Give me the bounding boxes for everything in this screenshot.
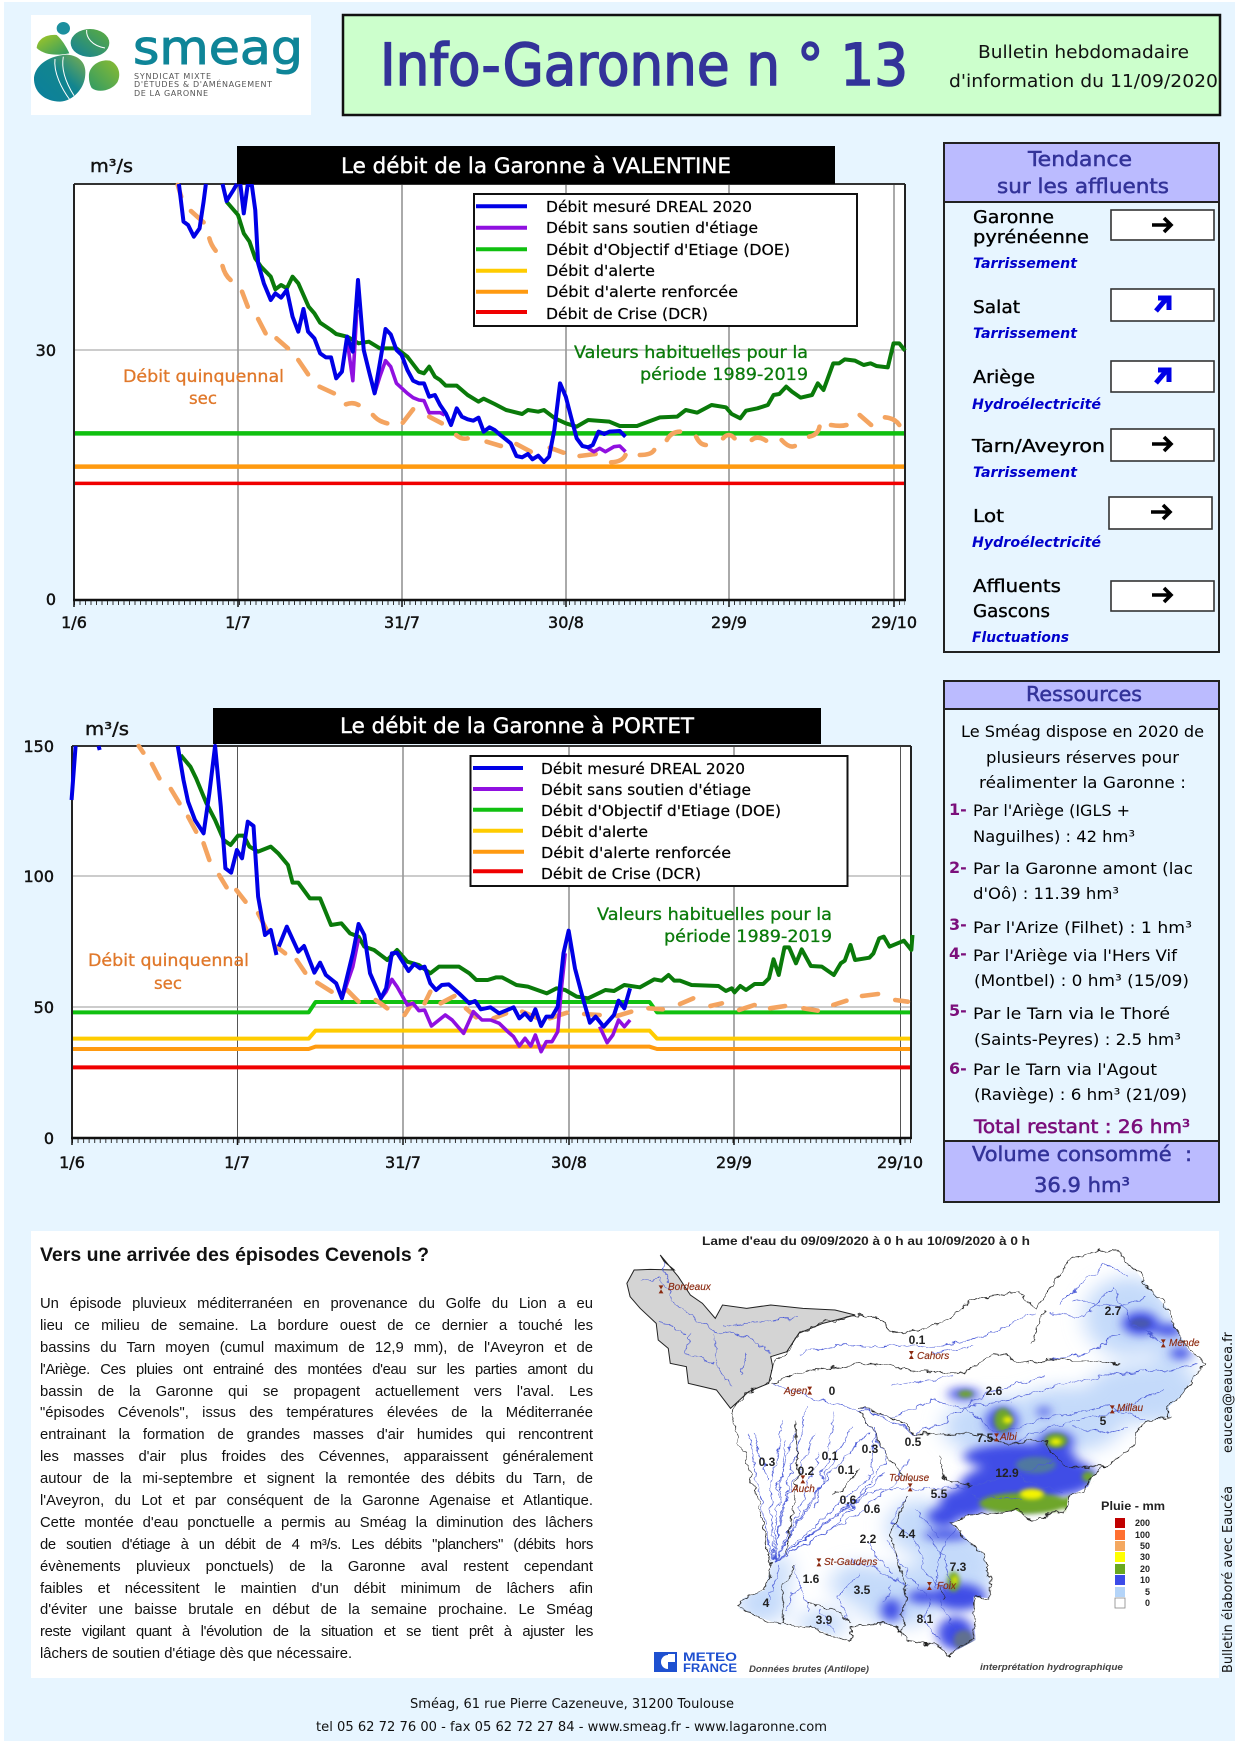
label: dry five-year flow: Débit quinquennal [88, 951, 249, 971]
city labels: Toulouse [889, 1473, 930, 1484]
item: Lot: Lot [973, 506, 1004, 527]
y axis labels: 50 [34, 998, 54, 1017]
map: rainfall over the Garonne basin [627, 1236, 1205, 1675]
rainfall values: 2.2 [860, 1532, 877, 1546]
reserve 4: (Montbel) : 0 hm³ (15/09) [974, 971, 1189, 990]
logo subtitle: DE LA GARONNE [134, 89, 208, 98]
curve: usual values [181, 755, 912, 998]
x axis labels: 31/7 [385, 1153, 421, 1172]
logo: Météo France: METEO [683, 1650, 737, 1664]
reserve 2: Par la Garonne amont (lac [973, 859, 1193, 878]
label: dry five-year flow [123, 367, 284, 409]
x axis labels [61, 613, 917, 632]
x axis labels: 29/10 [871, 613, 917, 632]
city labels: Millau [1117, 1403, 1144, 1414]
rainfall values: 0.2 [798, 1464, 815, 1478]
item: Ariège: Hydroélectricité [972, 397, 1102, 413]
panel heading: Ressources [1026, 682, 1142, 706]
rainfall legend: 30 [1140, 1552, 1150, 1562]
panel heading [944, 681, 1219, 709]
x axis labels: 29/10 [877, 1153, 923, 1172]
y axis unit: m³/s [85, 719, 129, 740]
article text: évènements pluvieux ponctuels) de la Garonne aval restent cependant [40, 1559, 593, 1575]
curve: measured flow [72, 746, 630, 1027]
reserve 2: d'Oô) : 11.39 hm³ [973, 884, 1119, 903]
label: dry five-year flow [88, 951, 249, 994]
logo: Météo France: FRANCE [683, 1661, 737, 1675]
reserve 4: 4- [949, 944, 967, 963]
item: Ariège: Ariège [973, 367, 1035, 388]
panel: article and map background [31, 1231, 1219, 1678]
panel: tributary trends [944, 143, 1219, 652]
y axis labels: 0 [44, 1129, 54, 1148]
x axis labels [59, 1153, 923, 1172]
city labels: Agen [783, 1386, 808, 1397]
legend: Débit d'alerte [541, 823, 648, 841]
curve: usual values [227, 202, 905, 427]
intro text: réalimenter la Garonne : [979, 773, 1186, 792]
side credit: Bulletin élaboré avec Eaucéa [1220, 1486, 1236, 1673]
x axis labels: 29/9 [716, 1153, 752, 1172]
legend: Débit d'Objectif d'Etiage (DOE) [541, 802, 781, 820]
intro text [961, 722, 1204, 792]
item: Affluents Gascons: Fluctuations [972, 630, 1069, 646]
legend: Débit d'alerte [546, 262, 655, 280]
item: Tarn/Aveyron [971, 429, 1214, 481]
reserve 6 [949, 1059, 1187, 1104]
item: Garonne pyrénéenne: pyrénéenne [973, 227, 1089, 248]
rainfall values: 0.1 [838, 1463, 855, 1477]
article text: autour de la mi-septembre et signent la remontée des débits du Tarn, de [40, 1471, 593, 1487]
rainfall values: 5.5 [931, 1487, 948, 1501]
footer address: Sméag, 61 rue Pierre Cazeneuve, 31200 Toulouse [410, 1697, 734, 1712]
legend: Débit d'alerte renforcée [546, 283, 738, 301]
item: Tarn/Aveyron: Tarrissement [973, 465, 1078, 481]
wordmark: smeag [133, 21, 303, 76]
title banner [343, 15, 1220, 115]
article text: bassin de la Garonne qui se propagent actuellement vers l'aval. Les [40, 1384, 593, 1400]
map shapes [627, 1248, 1205, 1655]
x axis labels: 30/8 [551, 1153, 587, 1172]
chart title: Le débit de la Garonne à PORTET [340, 714, 694, 738]
legend: Débit sans soutien d'étiage [541, 781, 751, 799]
legend: Débit de Crise (DCR) [541, 865, 701, 883]
rainfall values: 2.6 [986, 1384, 1003, 1398]
article text: faibles et nécessitent le maintien d'un débit minimum de lâchers afin [40, 1581, 593, 1597]
item: Salat: Salat [973, 297, 1020, 318]
item: Salat [973, 289, 1214, 342]
reserve 6: 6- [949, 1059, 967, 1078]
y axis labels: 30 [36, 341, 56, 360]
reserve 1: Naguilhes) : 42 hm³ [973, 827, 1135, 846]
rainfall legend: 50 [1140, 1541, 1150, 1551]
rainfall values: 0 [829, 1384, 836, 1398]
reserve 4 [949, 944, 1189, 990]
panel: resources [944, 681, 1219, 1202]
x axis labels: 1/7 [225, 613, 251, 632]
city labels: Foix [937, 1581, 957, 1592]
curve: flow without support [342, 938, 630, 1052]
plot area [71, 746, 912, 1145]
reserve 1: 1- [949, 800, 967, 819]
city labels: Bordeaux [668, 1282, 712, 1293]
side credit [1220, 1332, 1236, 1673]
interpretation note: interprétation hydrographique [980, 1662, 1124, 1673]
rainfall values: 4.4 [899, 1527, 916, 1541]
rainfall values: 7.3 [950, 1560, 967, 1574]
rainfall values: 0.5 [905, 1435, 922, 1449]
article text: les masses d'air plus froides des Cévennes, apparaissent généralement [40, 1449, 593, 1465]
rainfall values: 0.3 [862, 1442, 879, 1456]
legend: Débit mesuré DREAL 2020 [546, 198, 752, 216]
bulletin date: d'information du 11/09/2020 [949, 71, 1218, 92]
label: usual values: Valeurs habituelles pour la [574, 343, 808, 363]
item: Ariège [972, 361, 1214, 413]
article text: l'Ariège. Ces pluies ont entrainé des montées d'eau sur les parties amont du [40, 1362, 593, 1378]
rainfall values: 5 [1100, 1414, 1107, 1428]
article text: lieu ce milieu de semaine. La bordure ouest de ce dernier a touché les [40, 1318, 593, 1334]
bulletin date [949, 42, 1218, 92]
item: Tarn/Aveyron: Tarn/Aveyron [971, 436, 1105, 457]
rainfall values: 0.1 [822, 1449, 839, 1463]
item: Garonne pyrénéenne: Garonne [973, 207, 1054, 228]
city labels: Albi [999, 1432, 1017, 1443]
rainfall values: 12.9 [995, 1466, 1019, 1480]
article text: Cette montée d'eau ponctuelle a permis au Sméag la diminution des lâchers [40, 1515, 593, 1531]
volume consumed: 36.9 hm³ [1034, 1173, 1130, 1197]
rainfall values: 7.5 [977, 1431, 994, 1445]
reserve 5 [949, 1001, 1181, 1049]
curve: measured flow [179, 184, 625, 462]
item: Affluents Gascons: Affluents [973, 576, 1061, 597]
chart: Valentine flow [36, 146, 917, 632]
rainfall legend: 100 [1135, 1530, 1150, 1540]
x axis labels: 29/9 [711, 613, 747, 632]
panel heading [944, 143, 1219, 202]
y axis labels: 0 [46, 590, 56, 609]
rainfall legend: 0 [1145, 1598, 1150, 1608]
rainfall values: 0.1 [909, 1333, 926, 1347]
label: usual values: période 1989-2019 [640, 365, 808, 385]
reserve 1: Par l'Ariège (IGLS + [973, 801, 1130, 820]
chart title [213, 708, 821, 744]
article text: l'Aveyron, du Lot et par conséquent de la Garonne Agenaise et Atlantique. [40, 1493, 593, 1509]
legend: Débit mesuré DREAL 2020 [541, 760, 745, 778]
volume consumed [944, 1141, 1219, 1202]
rainfall values [759, 1304, 1122, 1627]
reserve 3: Par l'Arize (Filhet) : 1 hm³ [973, 918, 1192, 937]
city labels: Mende [1169, 1338, 1200, 1349]
rainfall values: 3.5 [854, 1583, 871, 1597]
legend: Débit de Crise (DCR) [546, 305, 708, 323]
label: usual values: Valeurs habituelles pour la [597, 905, 832, 925]
x axis labels: 1/6 [59, 1153, 85, 1172]
label: usual values [597, 905, 832, 947]
label: usual values: période 1989-2019 [664, 927, 832, 947]
volume consumed: Volume consommé : [972, 1142, 1192, 1166]
reserve 4: Par l'Ariège via l'Hers Vif [973, 946, 1177, 965]
reserve 2 [949, 858, 1193, 903]
label: dry five-year flow: sec [189, 389, 217, 409]
reserve 1 [949, 800, 1135, 846]
footer address [316, 1697, 827, 1735]
reserve 6: (Raviège) : 6 hm³ (21/09) [974, 1085, 1187, 1104]
x axis labels: 1/7 [224, 1153, 250, 1172]
city markers [659, 1285, 1166, 1590]
logo subtitle: D'ÉTUDES & D'AMÉNAGEMENT [134, 78, 272, 89]
article text: Un épisode pluvieux méditerranéen en provenance du Golfe du Lion a eu [40, 1296, 593, 1312]
panel heading: sur les affluents [997, 174, 1169, 198]
title: Info-Garonne n ° 13 [380, 31, 908, 99]
icon: pebbles [34, 22, 119, 102]
reserve 5: 5- [949, 1001, 967, 1020]
label: dry five-year flow: Débit quinquennal [123, 367, 284, 387]
rainfall legend [1101, 1499, 1165, 1608]
rainfall values: 3.9 [816, 1613, 833, 1627]
article text: entrainant la formation de grandes masses d'air humides qui rencontrent [40, 1427, 593, 1443]
total remaining: Total restant : 26 hm³ [973, 1116, 1190, 1138]
curve: dry five-year flow [139, 746, 908, 1018]
legend [474, 194, 857, 326]
curve: dry five-year flow [178, 185, 899, 462]
chart title [237, 146, 835, 184]
legend: Débit sans soutien d'étiage [546, 219, 758, 237]
rainfall intensity [737, 1277, 1205, 1650]
label: usual values [574, 343, 808, 385]
reserve 5: Par le Tarn via le Thoré [973, 1004, 1170, 1023]
rainfall values: 0.6 [840, 1493, 857, 1507]
legend: Débit d'Objectif d'Etiage (DOE) [546, 241, 790, 259]
article text [40, 1296, 593, 1662]
label: dry five-year flow: sec [154, 974, 182, 994]
rainfall values: 4 [763, 1596, 770, 1610]
rainfall values: 0.3 [759, 1455, 776, 1469]
rainfall legend: 200 [1135, 1518, 1150, 1528]
intro text: plusieurs réserves pour [986, 748, 1179, 767]
x axis labels: 31/7 [384, 613, 420, 632]
reserve 6: Par le Tarn via l'Agout [973, 1060, 1157, 1079]
item: Lot [972, 497, 1212, 551]
y axis labels [36, 341, 56, 609]
panel heading: Tendance [1027, 147, 1132, 171]
rainfall values: 0.6 [864, 1502, 881, 1516]
rainfall values: 1.6 [803, 1572, 820, 1586]
article text: lâchers de soutien d'étiage dès que nécessaire. [40, 1646, 352, 1662]
reserve 5: (Saints-Peyres) : 2.5 hm³ [974, 1030, 1181, 1049]
article text: de soutien d'étiage à un débit de 4 m³/s. Les débits "planchers" (débits hors [40, 1537, 593, 1553]
item: Affluents Gascons [972, 576, 1214, 646]
y axis unit: m³/s [90, 156, 133, 177]
article text: "épisodes Cévenols", issus des températures élevées de la Méditerranée [40, 1405, 593, 1421]
intro text: Le Sméag dispose en 2020 de [961, 722, 1204, 741]
reserve 3: 3- [949, 915, 967, 934]
y axis labels [23, 737, 54, 1148]
article text: bassins du Tarn moyen (cumul maximum de 12,9 mm), de l'Aveyron et de [40, 1340, 593, 1356]
item: Garonne pyrénéenne: Tarrissement [973, 256, 1078, 272]
article text: d'éviter une baisse brutale en début de la semaine prochaine. Le Sméag [40, 1602, 593, 1618]
y axis labels: 150 [23, 737, 54, 756]
article text: reste vigilant quant à l'évolution de la situation et se tient prêt à ajuster les [40, 1624, 593, 1640]
chart: Portet flow [23, 708, 923, 1172]
item: Garonne pyrénéenne [973, 207, 1214, 272]
x axis labels: 1/6 [61, 613, 87, 632]
city labels: Auch [791, 1484, 815, 1495]
side credit: eaucea@eaucea.fr [1220, 1332, 1236, 1453]
chart title: Le débit de la Garonne à VALENTINE [341, 154, 731, 178]
map title: Lame d'eau du 09/09/2020 à 0 h au 10/09/2020 à 0 h [702, 1236, 1030, 1248]
logo: SMEAG [31, 15, 311, 115]
data source note: Données brutes (Antilope) [749, 1664, 869, 1675]
rainfall values: 2.7 [1105, 1304, 1122, 1318]
curve: flow without support [347, 310, 625, 452]
city labels: St-Gaudens [824, 1557, 877, 1568]
legend [470, 756, 848, 886]
logo subtitle [134, 72, 272, 98]
reserve 2: 2- [949, 858, 967, 877]
legend: Débit d'alerte renforcée [541, 844, 731, 862]
rainfall legend: 5 [1145, 1587, 1150, 1597]
rainfall legend: 10 [1140, 1575, 1150, 1585]
region: grey outside area [627, 1255, 855, 1408]
rivers [640, 1263, 1197, 1640]
x axis labels: 30/8 [548, 613, 584, 632]
footer address: tel 05 62 72 76 00 - fax 05 62 72 27 84 - www.smeag.fr - www.lagaronne.com [316, 1720, 827, 1735]
basin boundaries [731, 1248, 1205, 1655]
bulletin date: Bulletin hebdomadaire [978, 42, 1189, 63]
logo: Météo France [654, 1650, 737, 1675]
item: Salat: Tarrissement [973, 326, 1078, 342]
item: Affluents Gascons: Gascons [973, 601, 1050, 622]
rainfall legend: 20 [1140, 1564, 1150, 1574]
y axis labels: 100 [23, 867, 54, 886]
rainfall legend: Pluie - mm [1101, 1499, 1165, 1513]
logo subtitle: SYNDICAT MIXTE [134, 72, 211, 81]
city labels: Cahors [917, 1351, 949, 1362]
city labels [668, 1282, 1200, 1592]
article title: Vers une arrivée des épisodes Cevenols ? [40, 1245, 429, 1266]
plot area [73, 184, 906, 607]
rainfall values: 8.1 [917, 1612, 934, 1626]
item: Lot: Hydroélectricité [972, 535, 1102, 551]
